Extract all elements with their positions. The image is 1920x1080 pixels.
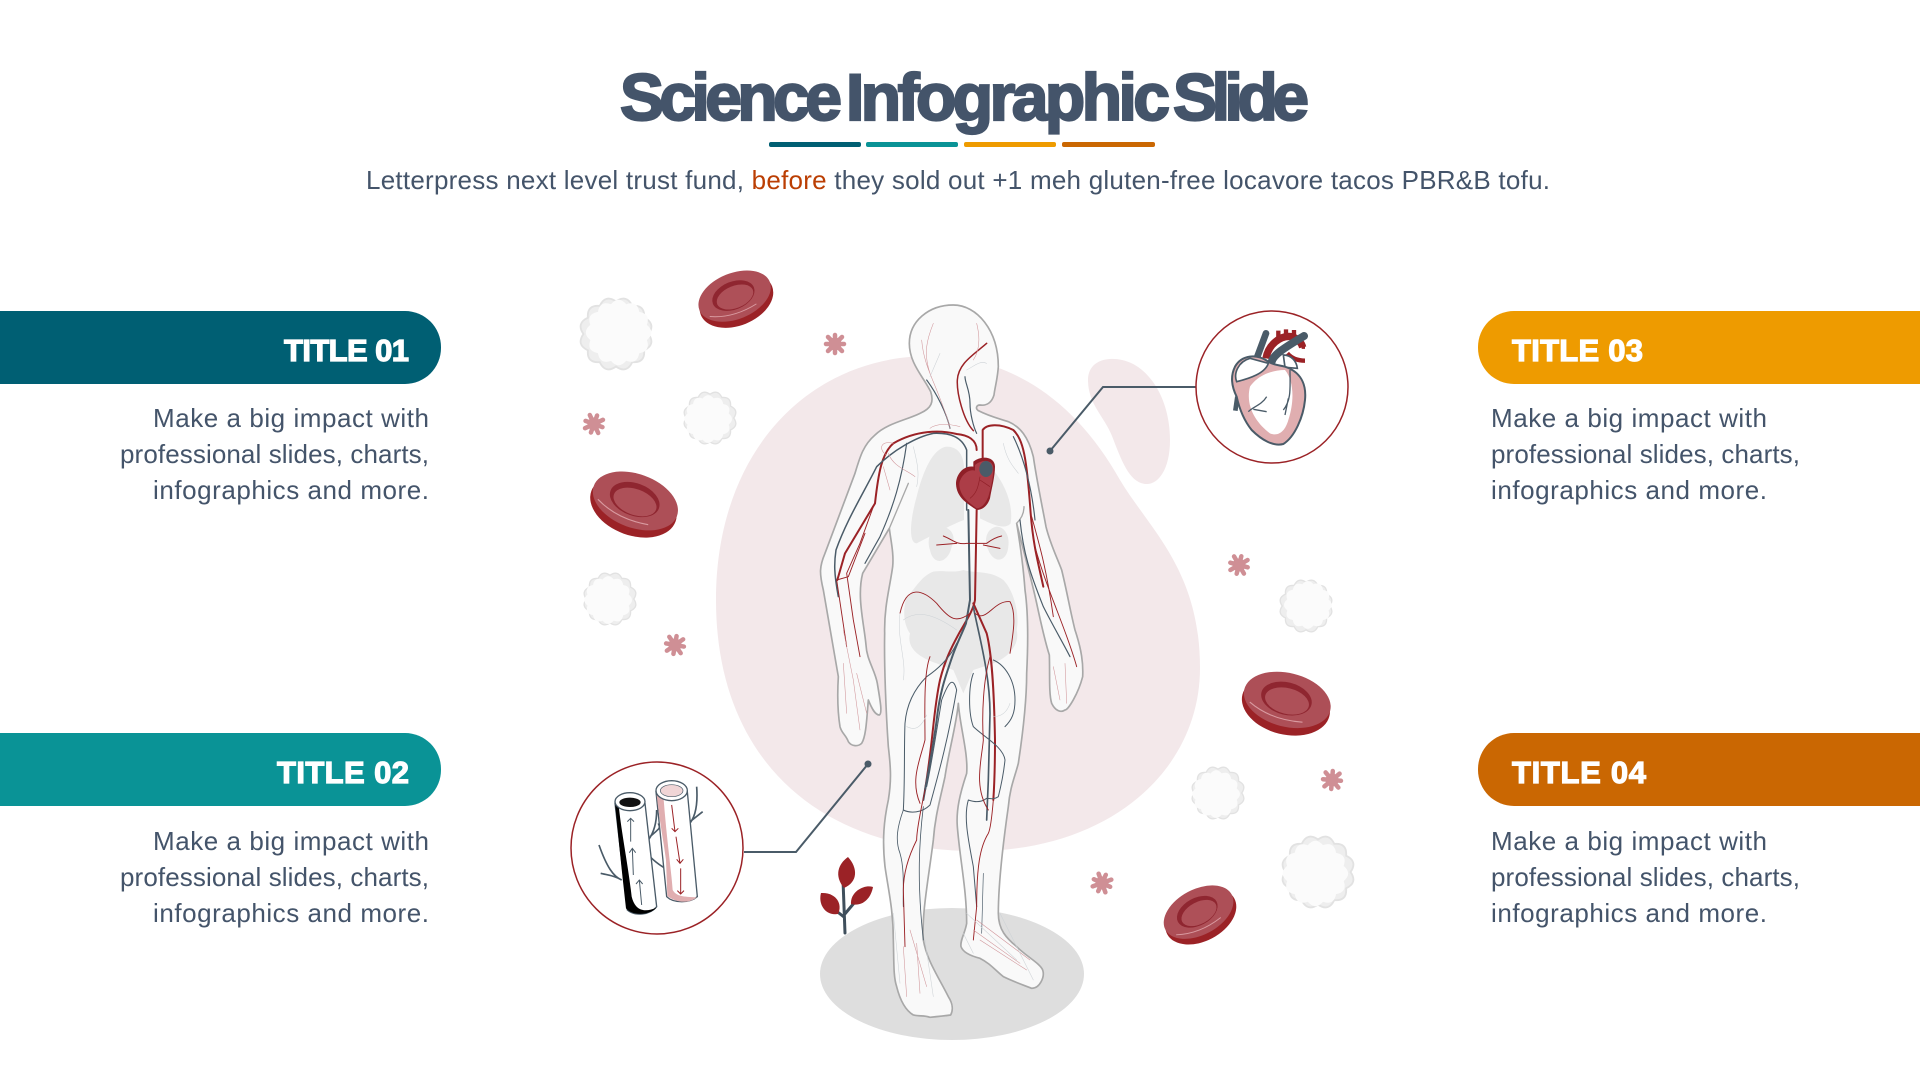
panel: title 03: infographics and more.: [1491, 475, 1767, 505]
title: Science: [620, 60, 842, 134]
veins: [835, 377, 1070, 940]
icon: heart circle: [1196, 311, 1348, 463]
panel: title 01: professional slides, charts,: [120, 439, 429, 469]
background blob: [716, 356, 1200, 851]
panel: title 02: TITLE 02: [277, 755, 409, 790]
icon: plant: [820, 857, 873, 933]
thin peripheral vessels: [843, 323, 1067, 997]
kidney vessels: [937, 536, 1002, 548]
white blood cells: [580, 293, 1354, 913]
panel: title 01: [0, 311, 441, 505]
panel: title 04: Make a big impact with: [1491, 826, 1767, 856]
heart: [956, 458, 995, 510]
callout line: heart: [1046, 387, 1196, 454]
red blood cells: [581, 260, 1337, 956]
panel: title 01: infographics and more.: [153, 475, 429, 505]
panel: title 02: professional slides, charts,: [120, 862, 429, 892]
panel: title 03: Make a big impact with: [1491, 403, 1767, 433]
panel: title 04: [1478, 733, 1920, 928]
panel: title 04: professional slides, charts,: [1491, 862, 1800, 892]
icon: blood vessels circle: [571, 762, 743, 934]
panel: title 02: [0, 733, 441, 928]
panel: title 04: TITLE 04: [1512, 755, 1647, 790]
thin arteries: [837, 507, 1077, 947]
panel: title 02: Make a big impact with: [153, 826, 429, 856]
armpit creases: [889, 483, 1024, 528]
subtitle: Letterpress next level trust fund, before they sold out +1 meh gluten-free locavore tacos PBR&B tofu.: [366, 165, 1550, 195]
title: Slide: [1173, 60, 1309, 134]
arteries (major): [837, 343, 1043, 800]
body outline: [821, 305, 1083, 1017]
panel: title 01: Make a big impact with: [153, 403, 429, 433]
organs: lungs, kidneys, intestines: [904, 447, 1018, 693]
callout line: vessels: [744, 760, 872, 852]
title: [620, 60, 1309, 134]
ground shadow ellipse: [820, 908, 1084, 1040]
panel: title 03: [1478, 311, 1920, 505]
title underline bars: [769, 142, 1155, 147]
panel: title 03: professional slides, charts,: [1491, 439, 1800, 469]
panel: title 03: TITLE 03: [1512, 333, 1643, 368]
panel: title 02: infographics and more.: [153, 898, 429, 928]
human body with circulatory system: [821, 305, 1083, 1017]
small pink particles: [582, 335, 1342, 895]
title: Infographic: [846, 60, 1170, 134]
panel: title 01: TITLE 01: [284, 333, 409, 368]
panel: title 04: infographics and more.: [1491, 898, 1767, 928]
